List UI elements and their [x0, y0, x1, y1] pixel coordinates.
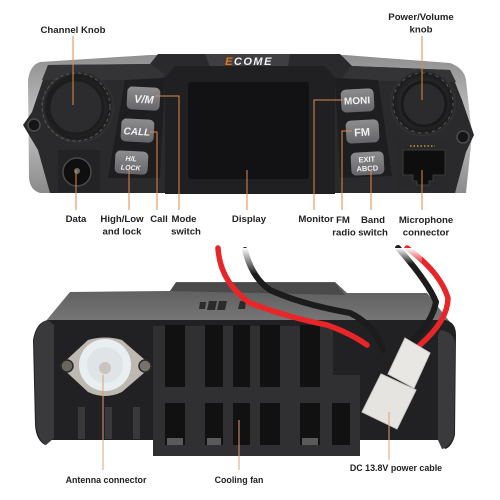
button: FM: FM: [354, 127, 370, 139]
label: Microphone connector: connector: [403, 228, 449, 238]
label: Antenna connector: Antenna connector: [66, 475, 147, 485]
icon: microphone connector: [395, 140, 447, 190]
label: Channel Knob: Channel Knob: [40, 25, 106, 36]
label: Band switch: switch: [358, 228, 388, 238]
button: MONI: MONI: [344, 95, 371, 108]
heatsink: [153, 325, 360, 456]
label: Microphone connector: Microphone: [399, 215, 453, 226]
button: H/L LOCK: H/L: [125, 156, 137, 163]
button: FM: [345, 119, 380, 144]
icon: data jack: [58, 150, 100, 192]
icon: antenna screw left: [61, 360, 73, 372]
logo strip: [205, 54, 290, 68]
label: Call: Call: [150, 214, 168, 225]
right end cap: [438, 330, 455, 449]
icon: left screw: [28, 119, 40, 131]
icon: white DC connector: [362, 338, 430, 429]
orange leader lines: front panel: [73, 36, 422, 210]
vents: [199, 301, 246, 310]
label: Monitor: Monitor: [298, 214, 334, 225]
orange leader lines: rear view: [103, 375, 389, 470]
left end cap: [34, 320, 54, 445]
lower fins near antenna: [78, 407, 140, 439]
icon: right screw: [457, 131, 469, 143]
label: High/Low and lock: and lock: [103, 226, 142, 238]
label: FM radio: radio: [332, 228, 356, 238]
icon: antenna screw right: [139, 360, 151, 372]
front panel of the radio: [23, 54, 474, 194]
logo strip: ECOME: [225, 56, 273, 68]
label: FM radio: FM: [336, 215, 350, 226]
button recesses: [108, 78, 165, 178]
label: Power/Volume knob: Power/Volume: [388, 12, 454, 23]
icon: antenna flange: [60, 338, 152, 396]
rear view of the radio: [33, 282, 456, 456]
silver housing: [28, 55, 472, 193]
label: Display: Display: [232, 214, 267, 225]
button: EXIT ABCD: [350, 151, 385, 176]
button: V/M: V/M: [134, 94, 155, 107]
chassis top: [45, 282, 450, 322]
button: MONI: [340, 88, 375, 113]
label: DC 13.8V power cable: DC 13.8V power cable: [350, 463, 442, 473]
button: EXIT ABCD: EXIT: [358, 155, 376, 164]
label: High/Low and lock: High/Low: [100, 214, 144, 225]
icon: channel knob: [42, 71, 114, 143]
icon: power volume knob: [390, 70, 456, 136]
button: H/L LOCK: [114, 150, 149, 175]
label: Band switch: Band: [361, 215, 385, 226]
label: Mode switch: switch: [171, 226, 201, 238]
button: EXIT ABCD: ABCD: [356, 163, 379, 174]
button: CALL: CALL: [123, 126, 150, 139]
button: CALL: [120, 118, 155, 143]
screen bezel: [165, 66, 335, 194]
label: Power/Volume knob: knob: [410, 24, 433, 36]
top ridge: [42, 64, 165, 80]
power wires: [218, 248, 448, 350]
icon: antenna connector cap: [79, 339, 131, 391]
rear body: [33, 320, 456, 449]
button: V/M: [126, 86, 161, 111]
label: Data: Data: [66, 214, 87, 225]
display screen: [188, 82, 309, 179]
label: Mode switch: Mode: [171, 214, 197, 225]
button: H/L LOCK: LOCK: [121, 164, 142, 173]
dark faceplate: [23, 54, 474, 193]
label: Cooling fan: Cooling fan: [215, 475, 263, 485]
